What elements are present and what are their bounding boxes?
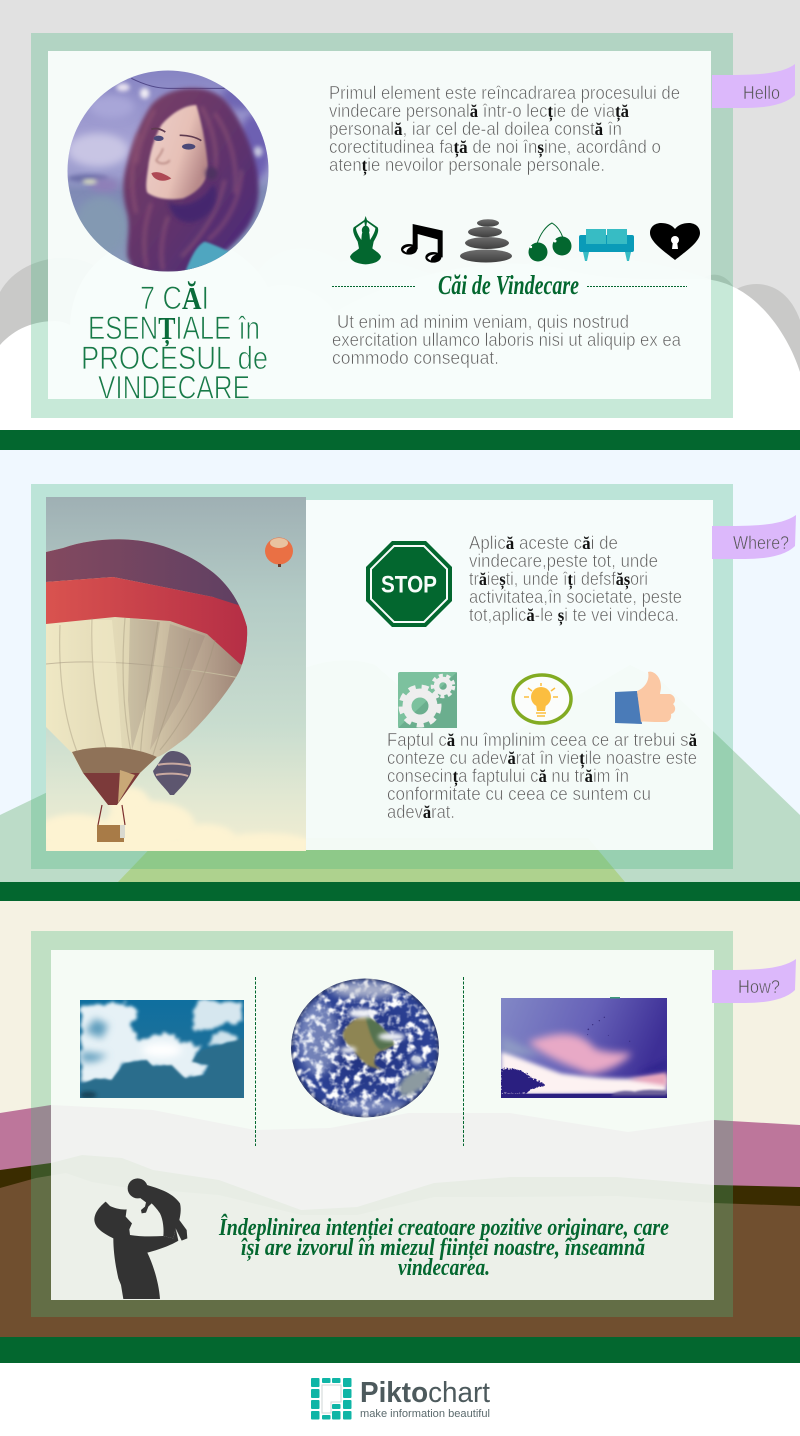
icon: stop sign <box>366 541 452 627</box>
closing message <box>218 1214 669 1281</box>
small tab above sunset photo <box>610 997 620 998</box>
section 1 frame <box>31 33 733 418</box>
section 3 background landscape <box>0 901 800 1337</box>
title: 7 CĂI <box>140 280 209 316</box>
title: PROCESUL de <box>81 340 268 376</box>
logo mark <box>311 1378 352 1420</box>
icon: sofa <box>579 229 634 261</box>
closing message: Îndeplinirea intenției creatoare pozitive originare, care <box>218 1214 669 1241</box>
where paragraph two: consecința faptului că nu trăim în <box>387 766 629 787</box>
ways heading with dashed rules: Căi de Vindecare <box>438 270 579 300</box>
closing message: vindecarea. <box>398 1255 490 1281</box>
Piktochart logo: make information beautiful <box>360 1408 490 1420</box>
face <box>146 105 208 199</box>
icon: stop sign: STOP <box>381 572 437 598</box>
shirt <box>185 242 230 274</box>
icon: thumbs up <box>615 672 675 724</box>
green divider bar 2 <box>0 882 800 901</box>
main balloon envelope <box>46 539 248 805</box>
green divider bar 1 <box>0 430 800 450</box>
section 2 panel <box>306 500 713 850</box>
title: VINDECARE <box>98 370 250 406</box>
icon: yoga figure <box>350 216 381 264</box>
section 2 frame <box>31 484 733 869</box>
second paragraph: commodo consequat. <box>332 348 499 368</box>
intro paragraph <box>329 83 680 176</box>
closing message: își are izvorul în miezul ființei noastre, înseamnă <box>241 1235 645 1261</box>
section 3 panel <box>51 950 714 1300</box>
intro paragraph: atenție nevoilor personale personale. <box>329 155 605 176</box>
Piktochart logo: Piktochart <box>360 1377 490 1409</box>
clouds photo <box>80 1000 244 1100</box>
where paragraph one: Aplică aceste căi de <box>469 533 618 553</box>
sunset photo <box>501 998 668 1100</box>
icon: lightbulb <box>513 675 571 723</box>
icon row: healing ways <box>350 216 700 264</box>
title <box>81 280 268 406</box>
ribbon: Hello: Hello <box>743 83 780 103</box>
ribbon: How <box>712 959 796 1003</box>
balloon photo <box>37 497 310 853</box>
intro paragraph: vindecare personală într-o lecție de viață <box>329 101 629 122</box>
icon: cherries <box>528 223 572 262</box>
section 2 background <box>0 450 800 882</box>
icon: heart with keyhole <box>650 223 700 260</box>
Piktochart logo <box>311 1377 490 1420</box>
where paragraph two: Faptul că nu împlinim ceea ce ar trebui să <box>387 730 697 750</box>
ribbon: Where: Where? <box>733 533 789 553</box>
where paragraph two: adevărat. <box>387 802 455 822</box>
footer white band <box>0 1363 800 1436</box>
where paragraph two: conteze cu adevărat în viețile noastre este <box>387 748 697 769</box>
second paragraph: Ut enim ad minim veniam, quis nostrud <box>337 312 629 332</box>
second paragraph: exercitation ullamco laboris nisi ut aliquip ex ea <box>332 330 682 350</box>
second paragraph <box>332 312 682 368</box>
where paragraph one <box>469 533 682 626</box>
earth photo <box>290 978 440 1118</box>
icon: gears <box>398 672 457 728</box>
where paragraph one: vindecare,peste tot, unde <box>469 551 658 571</box>
dashed separators <box>256 977 464 1146</box>
small dark balloon <box>153 751 191 795</box>
ribbon: How: How? <box>738 977 780 997</box>
section 1 background <box>0 0 800 430</box>
clouds at the base of the photo <box>37 787 310 853</box>
icon: music notes <box>401 224 443 263</box>
intro paragraph: Primul element este reîncadrarea procesului de <box>329 83 680 103</box>
intro paragraph: personală, iar cel de-al doilea constă în <box>329 119 622 139</box>
ribbon: Hello <box>712 64 795 108</box>
where paragraph one: tot,aplică-le și te vei vindeca. <box>469 605 679 626</box>
where paragraph one: trăiești, unde îți defsfășori <box>469 569 648 590</box>
where paragraph one: activitatea,în societate, peste <box>469 587 682 607</box>
small orange balloon <box>265 538 293 567</box>
ribbon: Where <box>712 515 796 559</box>
where paragraph two <box>387 730 697 822</box>
intro paragraph: corectitudinea față de noi înșine, acordând o <box>329 137 661 158</box>
section 3 frame <box>31 931 733 1317</box>
icon: parent lifting child silhouette <box>94 1178 187 1299</box>
title: ESENȚIALE în <box>88 310 260 347</box>
hair mass <box>123 88 259 274</box>
green divider bar 3 <box>0 1337 800 1363</box>
section 1 panel <box>48 51 711 399</box>
where paragraph two: conformitate cu ceea ce suntem cu <box>387 784 651 804</box>
portrait photo circle <box>66 68 271 274</box>
icon: zen stones <box>460 219 512 262</box>
